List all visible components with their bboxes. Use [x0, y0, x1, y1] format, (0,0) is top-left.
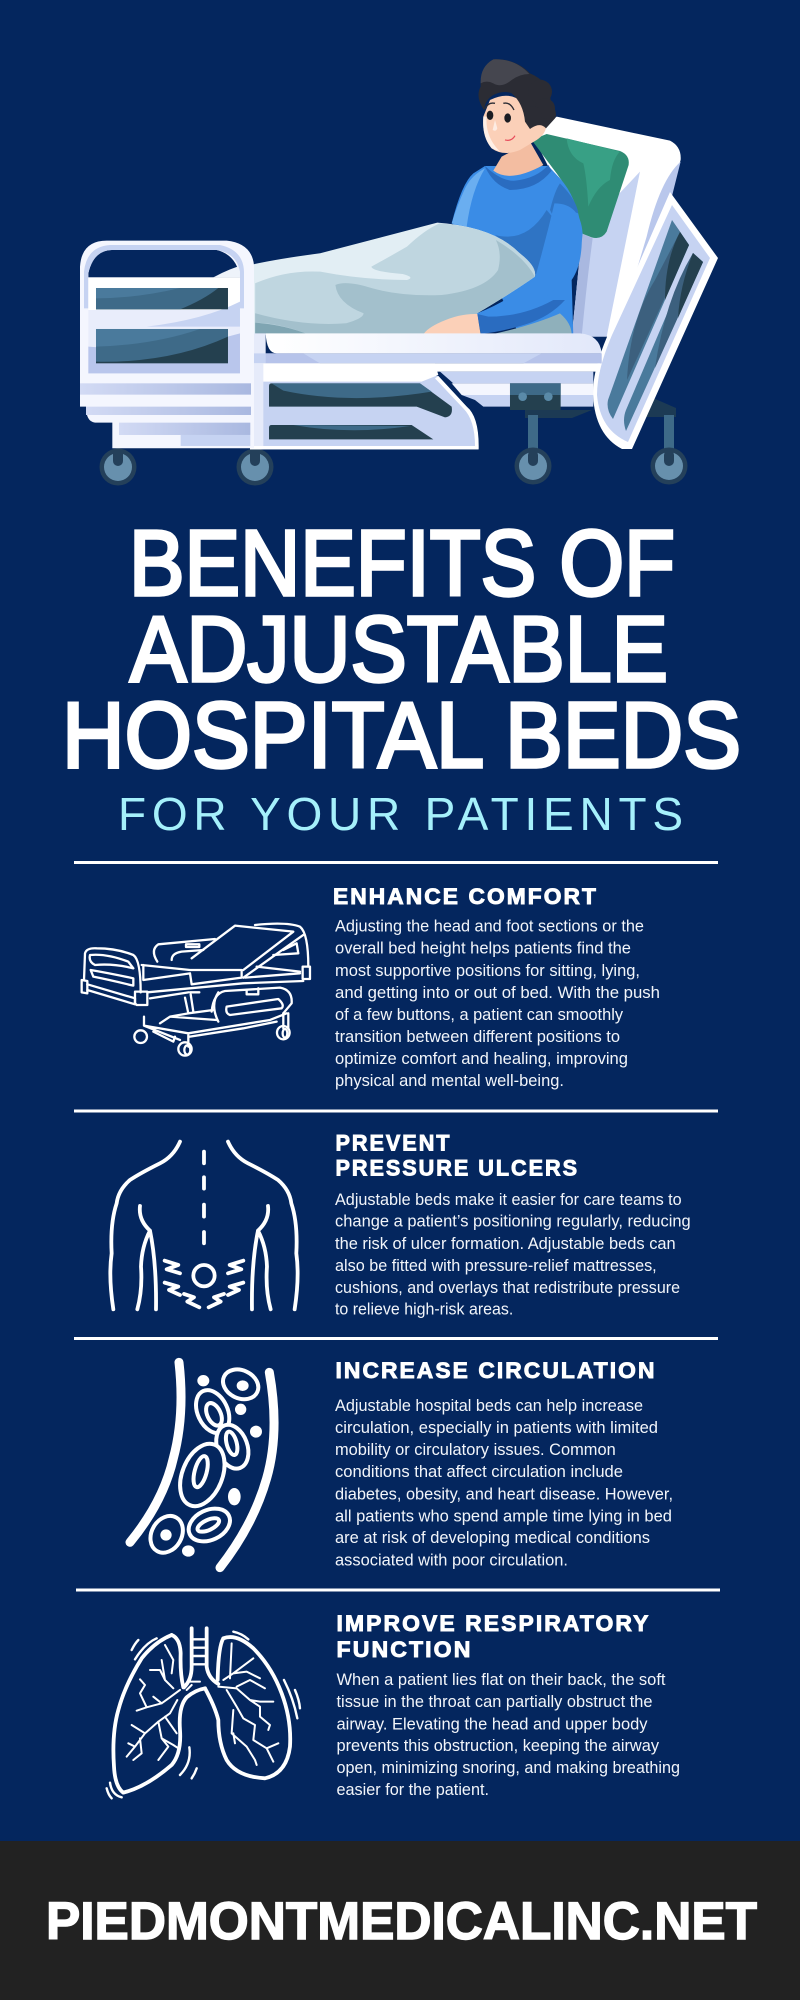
text block: improve respiratory function: easier for the patient. [336, 1781, 489, 1799]
text block: increase circulation: mobility or circulatory issues. Common [335, 1441, 616, 1459]
backrest [533, 117, 681, 337]
text block: enhance comfort: overall bed height helps patients find the [335, 940, 631, 958]
text block: prevent pressure ulcers: cushions, and overlays that redistribute pressure [335, 1279, 680, 1297]
foot board bands [80, 383, 251, 446]
text block: enhance comfort: and getting into or out of bed. With the push [335, 984, 660, 1002]
text block: prevent pressure ulcers: to relieve high-risk areas. [335, 1301, 513, 1319]
text block: prevent pressure ulcers: also be fitted with pressure-relief mattresses, [335, 1257, 657, 1275]
text block: increase circulation: conditions that affect circulation include [335, 1463, 623, 1481]
text block: increase circulation: are at risk of developing medical conditions [335, 1529, 650, 1547]
text block: enhance comfort: optimize comfort and healing, improving [335, 1050, 628, 1068]
text block: improve respiratory function: open, minimizing snoring, and making breathing [336, 1759, 680, 1777]
title [62, 511, 741, 787]
subtitle: FOR YOUR PATIENTS [118, 788, 683, 840]
footer url: PIEDMONTMEDICALINC.NET [46, 1892, 757, 1951]
rail slots [96, 288, 228, 363]
text block: prevent pressure ulcers: the risk of ulcer formation. Adjustable beds can [335, 1235, 676, 1253]
neck and collar [485, 142, 552, 190]
text block: improve respiratory function: tissue in the throat can partially obstruct the [336, 1693, 652, 1711]
bed legs and wheels [100, 398, 688, 486]
hand and sleeve [423, 300, 572, 335]
text block: prevent pressure ulcers: Adjustable beds make it easier for care teams to [335, 1191, 682, 1209]
heading: improve respiratory function: FUNCTION [336, 1637, 472, 1662]
text block: enhance comfort: transition between different positions to [335, 1028, 620, 1046]
text block: prevent pressure ulcers [335, 1191, 691, 1319]
foot board [80, 241, 254, 448]
icon: bed outline [82, 924, 310, 1056]
text block: improve respiratory function: prevents this obstruction, keeping the airway [336, 1737, 660, 1755]
bed frame, mattress, hand [250, 300, 602, 449]
foot section with slots [250, 363, 479, 449]
text block: improve respiratory function: When a patient lies flat on their back, the soft [336, 1671, 666, 1689]
footer bar [0, 1841, 800, 2000]
text block: increase circulation: Adjustable hospital beds can help increase [335, 1397, 643, 1415]
hero illustration: patient in hospital bed [80, 59, 718, 486]
head [478, 59, 556, 153]
text block: increase circulation: all patients who spend ample time lying in bed [335, 1507, 672, 1525]
text block: increase circulation: diabetes, obesity, and heart disease. However, [335, 1486, 673, 1504]
text block: increase circulation [335, 1397, 673, 1570]
heading: prevent pressure ulcers: PREVENT [336, 1130, 452, 1155]
heading: improve respiratory function [336, 1611, 650, 1662]
text block: improve respiratory function: airway. Elevating the head and upper body [336, 1715, 648, 1733]
pillow [532, 134, 629, 238]
heading: increase circulation: INCREASE CIRCULATION [336, 1358, 656, 1383]
text block: improve respiratory function [336, 1671, 680, 1799]
title: ADJUSTABLE [130, 597, 668, 701]
text block: increase circulation: circulation, especially in patients with limited [335, 1419, 658, 1437]
panel: increase circulation [130, 1358, 673, 1570]
title: HOSPITAL BEDS [62, 683, 741, 787]
mattress [250, 333, 602, 372]
panel: enhance comfort [82, 884, 660, 1090]
icon: lungs [107, 1628, 300, 1798]
text block: enhance comfort: of a few buttons, a patient can smoothly [335, 1006, 624, 1024]
bed rails [440, 372, 593, 410]
text block: enhance comfort: Adjusting the head and foot sections or the [335, 918, 644, 936]
heading: enhance comfort: ENHANCE COMFORT [333, 884, 598, 909]
heading: improve respiratory function: IMPROVE RESPIRATORY [336, 1611, 650, 1636]
headboard panel [593, 192, 718, 449]
title: BENEFITS OF [129, 511, 675, 615]
torso [452, 166, 582, 337]
heading: prevent pressure ulcers [336, 1130, 579, 1180]
panel: prevent pressure ulcers [110, 1130, 691, 1319]
icon: blood vessel with cells [130, 1362, 274, 1568]
heading: prevent pressure ulcers: PRESSURE ULCERS [336, 1155, 579, 1180]
backrest, pillow and patient torso [452, 59, 681, 337]
text block: prevent pressure ulcers: change a patient’s positioning regularly, reducing [335, 1213, 691, 1231]
text block: enhance comfort: most supportive positions for sitting, lying, [335, 962, 640, 980]
text block: enhance comfort: physical and mental well-being. [335, 1072, 564, 1090]
panel: improve respiratory function [107, 1611, 680, 1799]
icon: back with lower pain [110, 1142, 298, 1309]
text block: increase circulation: associated with poor circulation. [335, 1552, 568, 1570]
text block: enhance comfort [335, 918, 660, 1090]
patient arm [477, 203, 583, 334]
blanket [212, 203, 583, 335]
